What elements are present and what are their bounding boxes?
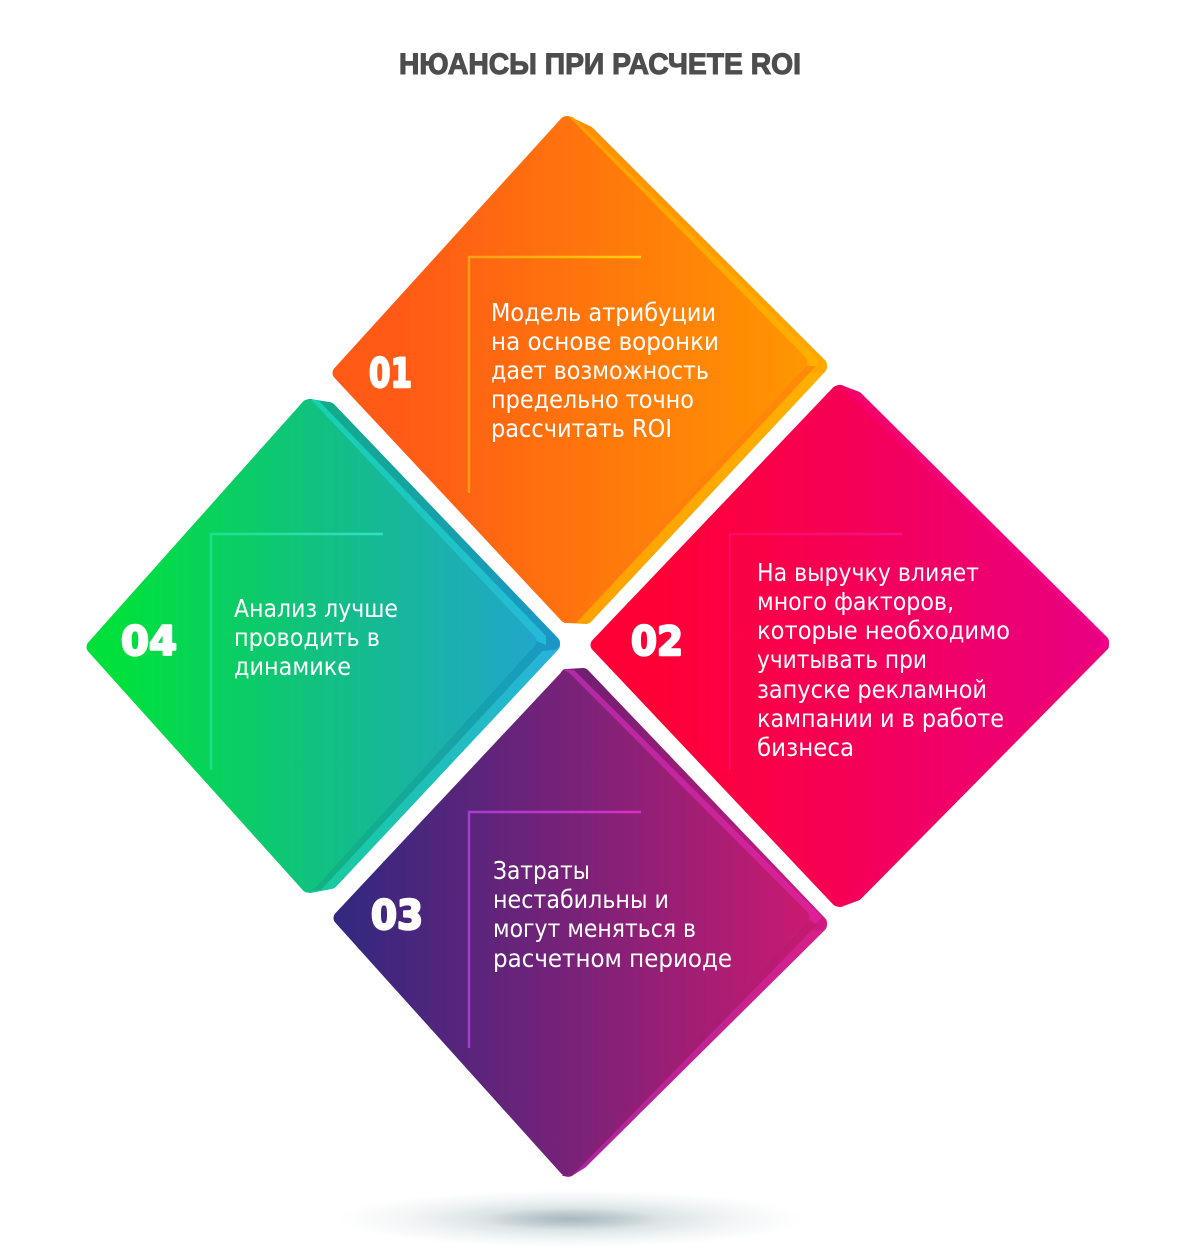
panel: item 01 orange diamond (340, 117, 820, 623)
text block 02 (757, 558, 1010, 762)
bracket line (730, 534, 902, 770)
text block 03: расчетном периоде (493, 944, 732, 973)
bracket line (469, 812, 641, 1048)
text block 01: рассчитать ROI (491, 414, 672, 443)
text block 01: на основе воронки (491, 327, 719, 356)
text block 02: запуске рекламной (757, 675, 987, 704)
text block 01: предельно точно (491, 385, 694, 414)
panel: item 04 green diamond (94, 400, 553, 892)
text block 03: могут меняться в (493, 914, 696, 943)
text block 01: Модель атрибуции (491, 298, 716, 327)
title: НЮАНСЫ ПРИ РАСЧЕТЕ ROI (399, 48, 801, 81)
number 03: 03 (371, 893, 423, 939)
text block 03: нестабильны и (493, 885, 669, 914)
panel: item 02 pink diamond (598, 392, 1102, 900)
text block 04: Анализ лучше (234, 594, 398, 623)
number 02: 02 (631, 619, 683, 665)
text block 02: много факторов, (757, 587, 954, 616)
text block 04: проводить в (234, 623, 380, 652)
text block 02: учитывать при (757, 645, 927, 674)
text block 03: Затраты (493, 856, 590, 885)
ground shadow (339, 1190, 803, 1248)
text block 01: дает возможность (491, 356, 709, 385)
bracket line (469, 257, 641, 493)
text block 04 (234, 594, 398, 681)
text block 03 (493, 856, 732, 973)
number 01: 01 (369, 351, 412, 397)
text block 01 (491, 298, 719, 443)
text block 02: На выручку влияет (757, 558, 979, 587)
panel: item 03 purple diamond (338, 669, 822, 1176)
text block 04: динамике (234, 652, 351, 681)
text block 02: кампании и в работе (757, 704, 1004, 733)
bracket line (211, 534, 383, 770)
number 04: 04 (121, 619, 177, 665)
text block 02: бизнеса (757, 733, 854, 762)
text block 02: которые необходимо (757, 616, 1010, 645)
